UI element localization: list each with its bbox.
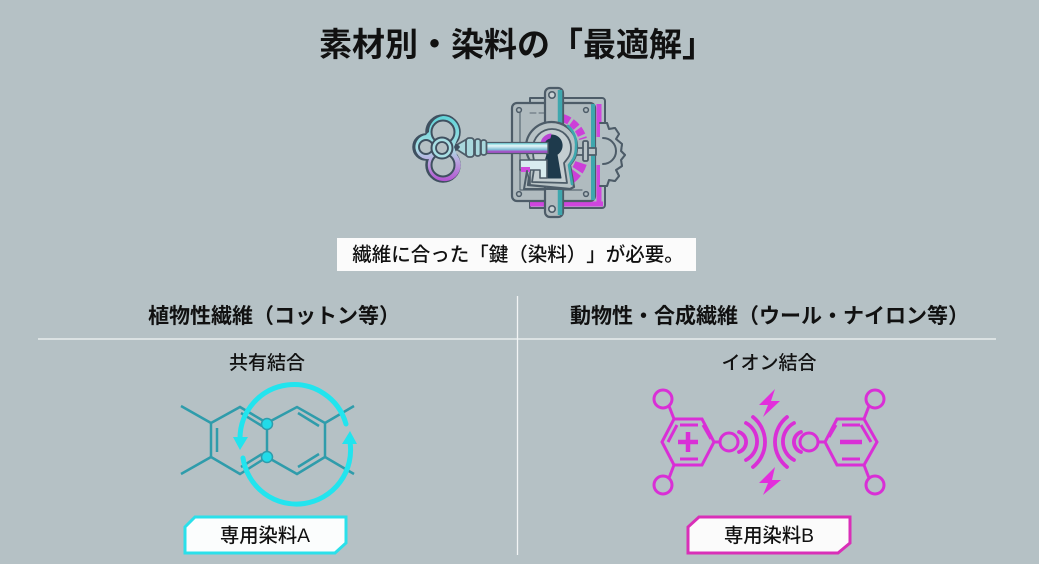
title: 素材別・染料の「最適解」 bbox=[319, 26, 715, 63]
icon: lightning bolts bbox=[759, 389, 781, 495]
icon: key in lock bbox=[414, 88, 625, 217]
diagram: ionic bond molecules bbox=[654, 389, 884, 495]
icon: key teeth bbox=[520, 160, 566, 189]
icon: front plate bbox=[512, 103, 595, 201]
icon: rotation arrows bbox=[240, 385, 351, 504]
label: dye B bbox=[688, 517, 850, 553]
label: dye A: 専用染料A bbox=[220, 525, 310, 547]
icon: bond atoms bbox=[262, 418, 272, 462]
icon: magenta inner gear bbox=[563, 118, 583, 182]
label: dye A bbox=[185, 517, 346, 553]
icon: positive molecule bbox=[654, 390, 738, 494]
label: dye B: 専用染料B bbox=[724, 525, 814, 547]
text: ionic bond: イオン結合 bbox=[721, 352, 817, 374]
icon: key collars bbox=[453, 138, 486, 157]
diagram: covalent bond molecule bbox=[181, 385, 357, 504]
icon: attraction waves bbox=[739, 417, 801, 467]
subtitle caption bbox=[337, 238, 696, 271]
icon: molecule skeleton bbox=[181, 406, 354, 474]
icon: gear behind lock bbox=[587, 123, 625, 186]
icon: key shaft bbox=[486, 142, 548, 154]
heading: plant fibers: 植物性繊維（コットン等） bbox=[148, 305, 400, 328]
subtitle caption: 繊維に合った「鍵（染料）」が必要。 bbox=[352, 244, 684, 266]
icon: vertical bar bbox=[545, 88, 563, 217]
text: covalent bond: 共有結合 bbox=[229, 352, 305, 374]
heading: animal and synthetic fibers: 動物性・合成繊維（ウール・ナイロン等） bbox=[570, 304, 969, 328]
icon: side bolt bbox=[573, 141, 596, 161]
icon: negative molecule bbox=[800, 390, 884, 494]
icon: rear plate bbox=[530, 98, 625, 208]
icon: keyhole escutcheon bbox=[526, 122, 577, 189]
icon: key bow bbox=[414, 116, 461, 181]
